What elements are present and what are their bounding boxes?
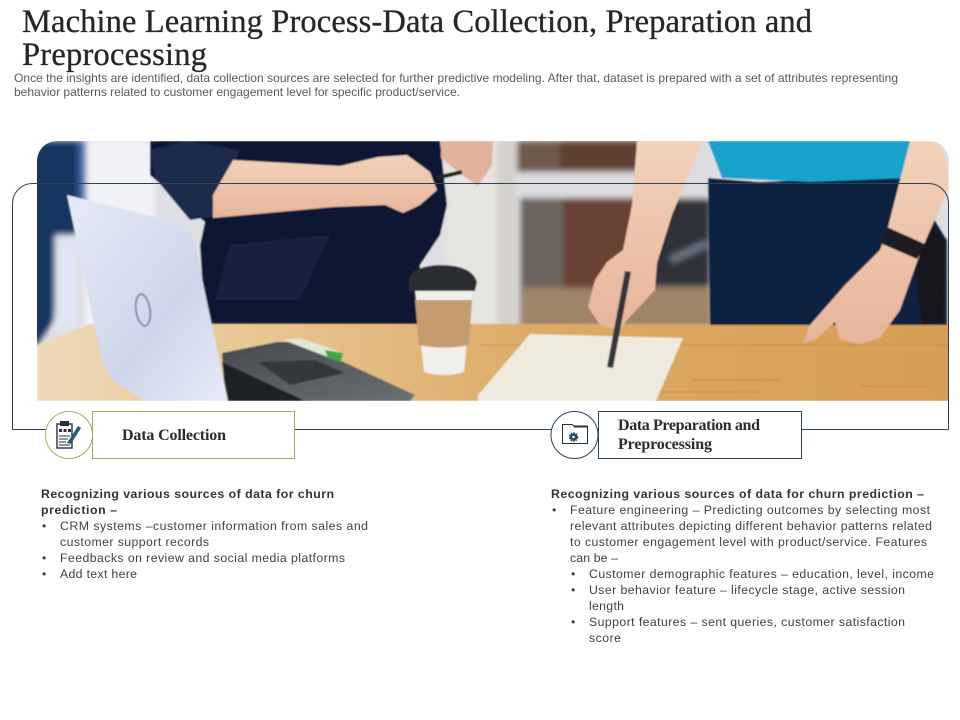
text block: data preparation details: •: [571, 615, 575, 629]
intro text block: [14, 71, 898, 99]
text block: data preparation details: Feature engineering – Predicting outcomes by selecting most: [570, 503, 931, 517]
text block: data collection details: Feedbacks on review and social media platforms: [60, 551, 345, 565]
text block: data collection details: •: [42, 519, 46, 533]
panel: data preparation header: Data Preparation and: [618, 417, 760, 434]
paper on the table: [478, 334, 683, 401]
text block: data preparation details: Recognizing various sources of data for churn prediction –: [551, 487, 924, 501]
panel: data collection header: [46, 412, 294, 458]
title: Preprocessing: [22, 37, 207, 73]
text block: data preparation details: [551, 487, 934, 645]
text block: data preparation details: relevant attributes depicting different behavior patterns related: [570, 519, 932, 533]
title: [22, 4, 812, 73]
text block: data collection details: [41, 487, 368, 581]
text block: data preparation details: length: [589, 599, 624, 613]
text block: data collection details: CRM systems –customer information from sales and: [60, 519, 368, 533]
intro text block: behavior patterns related to customer engagement level for specific product/service.: [14, 85, 460, 99]
text block: data collection details: Add text here: [60, 567, 137, 581]
text block: data preparation details: •: [571, 567, 575, 581]
text block: data preparation details: to customer engagement level with product/service. Features: [570, 535, 927, 549]
text block: data collection details: •: [42, 551, 46, 565]
icon: folder with gear: [551, 412, 598, 458]
person one: arm and hands: [213, 155, 437, 218]
text block: data preparation details: Customer demographic features – education, level, income: [589, 567, 934, 581]
background: blurred office shelves: [447, 141, 949, 331]
person two: left arm, hand and pen: [588, 141, 703, 330]
text block: data collection details: customer support records: [60, 535, 209, 549]
text block: data preparation details: •: [571, 583, 575, 597]
panel: data collection header: Data Collection: [122, 427, 226, 444]
text block: data preparation details: •: [552, 503, 556, 517]
text block: data preparation details: User behavior feature – lifecycle stage, active session: [589, 583, 905, 597]
background: blurred left window: [30, 141, 155, 345]
panel: data preparation header: Preprocessing: [618, 436, 712, 453]
panel: data preparation header: [551, 412, 802, 458]
text block: data preparation details: can be –: [570, 551, 618, 565]
text block: data collection details: Recognizing various sources of data for churn: [41, 487, 334, 501]
laptop base and keyboard: [222, 342, 415, 401]
text block: data collection details: •: [42, 567, 46, 581]
person two: right arm, hand and watch: [803, 141, 948, 344]
person one: dark jacket: [150, 141, 447, 324]
text block: data preparation details: Support features – sent queries, customer satisfaction: [589, 615, 905, 629]
icon: clipboard and pen: [46, 412, 92, 458]
frame outline around photo and headers: [12, 184, 948, 430]
intro text block: Once the insights are identified, data collection sources are selected for further predictive modeling. After that, dataset is prepared with a set of attributes representing: [14, 71, 898, 85]
laptop lid: [67, 195, 228, 401]
photo: team working at a desk with laptop and coffee: [30, 141, 949, 401]
title: Machine Learning Process-Data Collection, Preparation and: [22, 4, 812, 40]
text block: data collection details: prediction –: [41, 503, 117, 517]
table top: [37, 324, 949, 401]
person two: teal shirt and navy trousers: [708, 176, 947, 325]
coffee cup: [415, 290, 472, 375]
text block: data preparation details: score: [589, 631, 621, 645]
